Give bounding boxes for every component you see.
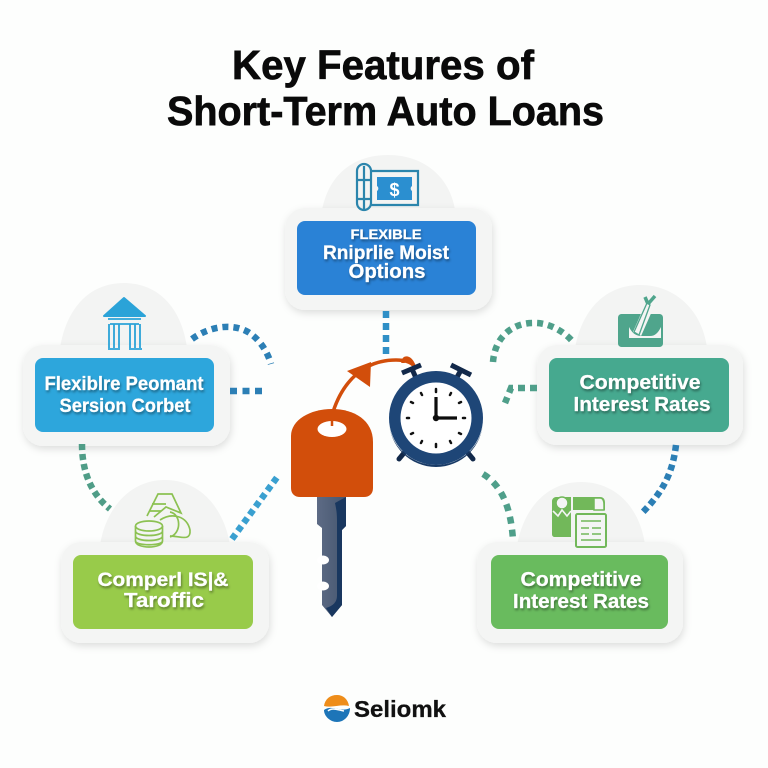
icon: alarm clock	[389, 365, 483, 467]
icon: car key	[291, 409, 373, 617]
panel: bottom right green	[477, 482, 683, 643]
label: flexible payment: Flexiblre Peomant	[44, 373, 204, 395]
icon: bank building	[104, 298, 145, 349]
label: flexible options: FLEXIBLE	[350, 226, 422, 242]
label: flexible options: Rniprlie Moist	[323, 243, 450, 264]
label: flexible options	[323, 226, 450, 283]
panel: top flexible options	[285, 155, 492, 310]
label: competitive teal	[574, 371, 710, 416]
panel: bottom left green	[61, 480, 269, 643]
logo: Seliomk	[354, 696, 447, 722]
panel: right teal	[537, 285, 743, 445]
clock ticks	[407, 389, 465, 447]
title: Short-Term Auto Loans	[167, 88, 604, 134]
label: green left: Taroffic	[124, 590, 204, 612]
dotted connectors	[82, 311, 676, 540]
panel: left flexible payment	[23, 283, 230, 446]
icon: documents	[552, 497, 606, 547]
label: competitive green: Competitive	[520, 568, 642, 591]
label: green left: Comperl IS|&	[98, 569, 228, 591]
label: flexible payment	[44, 373, 204, 417]
title: Key Features of	[232, 42, 534, 88]
label: competitive teal: Interest Rates	[574, 393, 710, 416]
label: green left	[98, 569, 228, 612]
arrow: key to clock	[333, 358, 414, 412]
label: flexible options: Options	[348, 261, 426, 283]
title	[167, 42, 604, 134]
icon: coins and money	[136, 494, 190, 547]
icon: dollar bill scroll: $	[389, 180, 400, 200]
label: competitive green	[513, 568, 649, 613]
label: competitive green: Interest Rates	[513, 590, 649, 613]
clock hands	[436, 397, 457, 418]
icon: tray with pen	[618, 296, 663, 347]
label: flexible payment: Sersion Corbet	[60, 395, 191, 417]
label: competitive teal: Competitive	[580, 371, 700, 394]
logo mark	[324, 695, 350, 722]
icon: dollar bill scroll	[357, 164, 418, 210]
